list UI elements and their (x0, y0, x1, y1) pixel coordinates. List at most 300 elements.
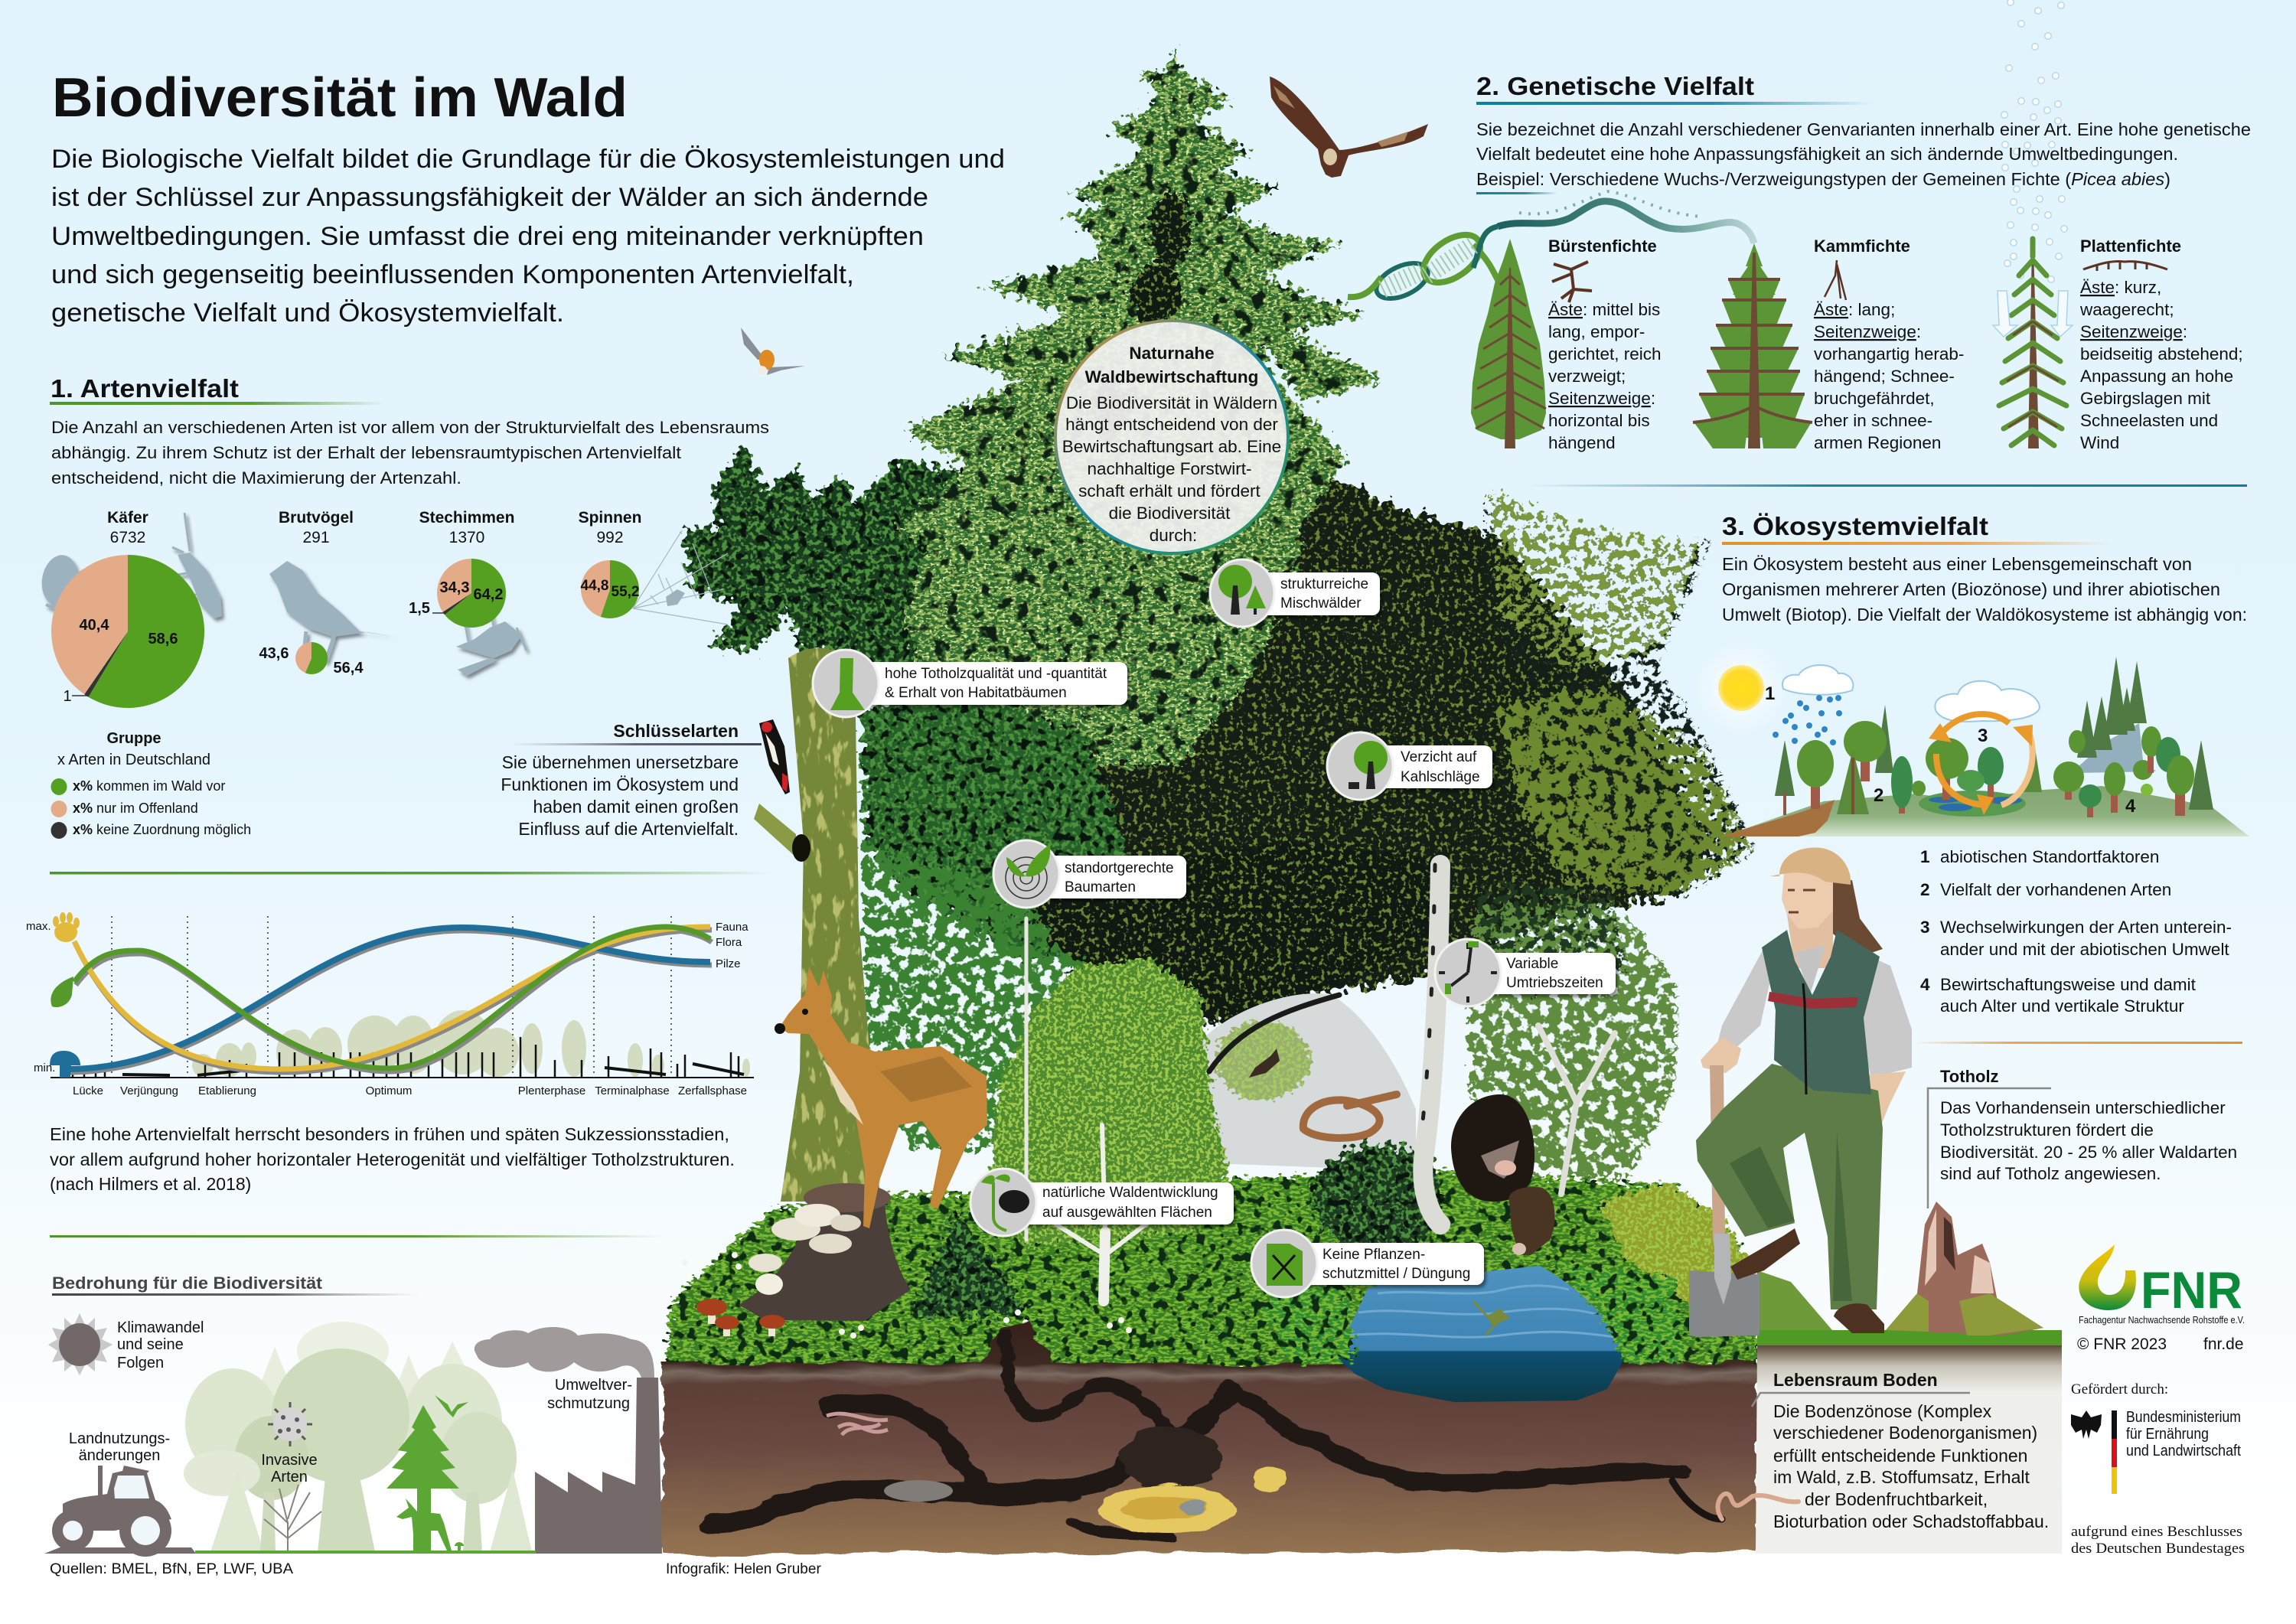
column: Plattenfichte: waagerecht; (2079, 300, 2174, 319)
icon: virus (268, 1402, 312, 1446)
leader (1928, 1088, 2051, 1208)
text: invasive (261, 1452, 318, 1485)
pie: Käfer (51, 509, 204, 708)
eye and lip (1788, 890, 1815, 912)
ecosystem trees centre group (1912, 738, 2042, 803)
text: climate: Folgen (117, 1355, 164, 1371)
sun (1694, 641, 1789, 735)
zip (1803, 983, 1806, 1094)
green spruce (386, 1405, 459, 1551)
section text: abhängig. Zu ihrem Schutz ist der Erhalt der lebensraumtypischen Artenvielfalt (51, 443, 682, 462)
FNR logo: FNR (2141, 1261, 2242, 1319)
succession chart (26, 912, 754, 1097)
central bubble: Waldbewirtschaftung (1085, 367, 1258, 386)
text: Organismen mehrerer Arten (Biozönose) und ihrer abiotischen (1722, 579, 2220, 599)
brown slope (1722, 800, 1835, 836)
moss on boulder (1215, 1020, 1310, 1100)
rule (509, 743, 762, 745)
dark broadleaf canopy, left lobes (682, 445, 995, 704)
pie: Käfer: Käfer (107, 509, 148, 527)
ecosystem scene (1694, 641, 2249, 836)
intro text: Die Biologische Vielfalt bildet die Grundlage für die Ökosystemleistungen und (51, 145, 1005, 174)
axis labels: Optimum (366, 1084, 412, 1097)
title: Biodiversität im Wald (52, 67, 628, 129)
divider green (50, 872, 773, 874)
section 2: Genetische Vielfalt (1476, 72, 2251, 194)
spade blade (1689, 1270, 1760, 1337)
pie: Brutvögel: 291 (302, 529, 330, 546)
dark twigs in birch canopy (1477, 880, 1630, 995)
heading: Lebensraum Boden (1773, 1370, 1938, 1390)
scene numbers: 1 (1765, 683, 1775, 704)
heading: 3. Ökosystemvielfalt (1722, 512, 1988, 540)
numbered list: auch Alter und vertikale Struktur (1940, 996, 2184, 1016)
pale forest backdrop (184, 1322, 532, 1552)
branch icon (1825, 260, 1846, 300)
tractor (52, 1466, 171, 1557)
raised boot (1730, 1228, 1800, 1280)
ministry name (2126, 1409, 2241, 1459)
scene numbers: 4 (2125, 796, 2136, 817)
spruce with drooping tiers (892, 46, 1383, 765)
callout: Umtriebszeiten (1435, 939, 1616, 1006)
copyright: © FNR 2023 (2077, 1335, 2167, 1353)
text: invasive: Invasive (261, 1452, 318, 1469)
curve: Fauna (74, 927, 710, 1069)
text: climate: und seine (117, 1336, 184, 1353)
column: Kammfichte: hängend; Schnee- (1814, 367, 1955, 386)
curve: Pilze (67, 928, 710, 1069)
central bubble: Die Biodiversität in Wäldern (1066, 393, 1277, 413)
callout: Mischwälder (1210, 559, 1380, 627)
sources: Quellen: BMEL, BfN, EP, LWF, UBA (50, 1561, 293, 1577)
grey shirt (1795, 945, 1825, 995)
dead stump (1886, 1202, 2043, 1335)
succession text: (nach Hilmers et al. 2018) (50, 1174, 251, 1194)
grass strip (1757, 1330, 2062, 1345)
woodpecker hole (792, 834, 810, 862)
column: Kammfichte: bruchgefährdet, (1814, 389, 1935, 408)
green leaves with sky gaps (865, 842, 1102, 1148)
text: land use (69, 1430, 170, 1464)
deer (775, 967, 987, 1228)
right sleeve (1860, 955, 1912, 1078)
branch icon (1552, 262, 1592, 302)
pie charts by group (38, 509, 728, 708)
numbered list: abiotischen Standortfaktoren (1940, 847, 2159, 866)
section 1: Artenvielfalt (50, 374, 769, 488)
heading: Bedrohung für die Biodiversität (52, 1273, 323, 1293)
central bubble (1055, 321, 1288, 553)
young green trees (987, 957, 1228, 1247)
callout: Waldentwicklung: auf ausgewählten Flächen (1042, 1205, 1212, 1221)
pie: Käfer: 1 (63, 688, 72, 705)
scene numbers: 3 (1978, 726, 1988, 746)
phase dividers (112, 916, 671, 1078)
threats section (44, 1273, 662, 1557)
text: pollution: schmutzung (547, 1395, 630, 1412)
spade handle (1710, 1065, 1725, 1270)
ecosystem right group (2053, 657, 2213, 817)
axis labels: Flora (716, 936, 742, 949)
pie: Käfer: 40,4 (80, 617, 109, 634)
cap (1769, 847, 1851, 885)
trunks and dead wood (73, 1037, 744, 1078)
text: land use: änderungen (79, 1447, 160, 1464)
column: Bürstenfichte: hängend (1548, 433, 1616, 452)
rain cloud (1773, 665, 1853, 745)
earthworm (1672, 1481, 1722, 1519)
text: Beispiel: Verschiedene Wuchs-/Verzweigungstypen der Gemeinen Fichte ( Picea abies) (1476, 169, 2170, 189)
pie: Stechimmen: 1370 (449, 529, 484, 546)
tree stump with fungi (739, 1183, 911, 1321)
pie: Brutvögel: 43,6 (259, 645, 289, 662)
face (1782, 865, 1833, 929)
woodpecker (759, 719, 790, 794)
text (1722, 554, 2247, 624)
callout: Mischwälder: strukturreiche (1280, 576, 1368, 592)
pie: Brutvögel (259, 509, 364, 677)
website: fnr.de (2203, 1335, 2244, 1353)
column: Plattenfichte: Gebirgslagen mit (2080, 389, 2211, 408)
callout: Kahlschläge (1327, 732, 1492, 800)
text: invasive: Arten (271, 1469, 308, 1485)
snowfall above Plattenfichte (2004, 2, 2064, 279)
silhouette: wasp (456, 608, 527, 676)
callout: Totholz: & Erhalt von Habitatbäumen (885, 685, 1067, 701)
column: Plattenfichte: beidseitig abstehend; (2080, 344, 2243, 364)
text: haben damit einen großen (533, 797, 739, 817)
ground (44, 1547, 536, 1554)
stag beetle (1249, 1048, 1280, 1078)
snake (1303, 1094, 1397, 1138)
robin (741, 328, 805, 375)
key species text block (501, 721, 762, 839)
ground vegetation (666, 1171, 1757, 1370)
numbered list: Bewirtschaftungsweise und damit (1940, 975, 2197, 994)
green deer (396, 1498, 452, 1551)
column: Plattenfichte: Wind (2080, 433, 2119, 452)
pie legend: x Arten in Deutschland (57, 752, 210, 768)
habitat tree trunk (781, 648, 880, 1202)
legend: forest: x% kommen im Wald vor (73, 778, 225, 794)
ministry name: Bundesministerium (2126, 1409, 2241, 1426)
white flowers (682, 1252, 1132, 1339)
neck (1787, 911, 1833, 968)
soil info box (1752, 1345, 2062, 1554)
icon: climate sun (48, 1313, 113, 1375)
pond (1336, 1266, 1623, 1402)
text (1476, 119, 2251, 189)
pie: Spinnen: 44,8 (581, 578, 608, 594)
BMEL logo (2071, 1409, 2241, 1494)
credit: Infografik: Helen Gruber (666, 1561, 821, 1577)
ribbon (1498, 201, 1754, 243)
pie: Brutvögel: 56,4 (334, 660, 364, 677)
branch icon (2083, 261, 2167, 271)
divider green lower (50, 1235, 662, 1238)
silhouette: bird (269, 561, 400, 662)
numbered list: Wechselwirkungen der Arten unterein- (1940, 918, 2232, 937)
text: Das Vorhandensein unterschiedlicher (1940, 1098, 2226, 1117)
pie: Brutvögel: Brutvögel (279, 509, 354, 527)
axis labels: Terminalphase (595, 1084, 670, 1097)
central bubble: hängt entscheidend von der (1065, 415, 1278, 434)
broken side branch (754, 804, 796, 857)
pie legend (51, 730, 251, 839)
curve: Flora (74, 927, 710, 1068)
callout: Pflanzenschutz (1251, 1230, 1484, 1297)
text: Funktionen im Ökosystem und (501, 774, 739, 794)
numbered list: 4 (1920, 975, 1930, 994)
column: Plattenfichte (2079, 236, 2243, 452)
text: climate (117, 1319, 204, 1371)
ministry name: für Ernährung (2126, 1426, 2209, 1443)
pie: Spinnen: 992 (596, 529, 624, 546)
silhouette: longhorn beetle (172, 513, 222, 618)
intro text: und sich gegenseitig beeinflussenden Komponenten Artenvielfalt, (51, 260, 854, 289)
sparse olive leaves upper right (1492, 490, 1703, 673)
trousers (1696, 1064, 1883, 1309)
text: verschiedener Bodenorganismen) (1773, 1423, 2037, 1443)
text: sind auf Totholz angewiesen. (1940, 1164, 2161, 1183)
dark bush (1313, 1144, 1443, 1251)
heading rule (50, 402, 384, 405)
leader (1752, 1393, 1970, 1407)
axis labels: Fauna (716, 921, 748, 934)
callout: Kahlschläge: Verzicht auf (1401, 749, 1477, 765)
column: Bürstenfichte (1548, 236, 1662, 452)
numbered list: 2 (1920, 880, 1930, 899)
numbered list: ander und mit der abiotischen Umwelt (1940, 940, 2229, 959)
text: Biodiversität. 20 - 25 % aller Waldarten (1940, 1143, 2237, 1162)
heading and intro (51, 67, 1005, 328)
axis labels: Pilze (716, 957, 741, 970)
silhouette: beetle round (38, 553, 84, 608)
pie legend: Gruppe (106, 730, 161, 747)
forearm and hand (1701, 1037, 1741, 1073)
icon: leaf (51, 977, 73, 1007)
axis labels: Lücke (73, 1084, 103, 1097)
standing boot (1834, 1303, 1884, 1333)
green owl (435, 1395, 468, 1417)
red mushrooms (696, 1299, 785, 1336)
divider teal (1526, 484, 2247, 487)
callout: Pflanzenschutz: schutzmittel / Düngung (1322, 1266, 1470, 1282)
axis labels: Plenterphase (518, 1084, 585, 1097)
dark canopy behind the spruce (1071, 467, 1714, 1010)
background trees (192, 1010, 750, 1077)
boulder (1192, 993, 1416, 1171)
ministry name: und Landwirtschaft (2126, 1443, 2241, 1459)
forester woman (1689, 847, 1912, 1337)
owl (1270, 77, 1428, 178)
central bubble: Naturnahe (1129, 344, 1215, 363)
curve shadows (68, 930, 712, 1072)
callout: Mischwälder: Mischwälder (1280, 595, 1362, 611)
callout: Kahlschläge: Kahlschläge (1401, 769, 1480, 785)
pie: Stechimmen (409, 509, 514, 628)
scene numbers: 2 (1874, 785, 1883, 806)
hair (1821, 880, 1883, 957)
spade tip (1714, 1234, 1731, 1305)
central chamber (1121, 1426, 1221, 1490)
column: Bürstenfichte: lang, empor- (1548, 322, 1645, 341)
dark spruce core (1091, 191, 1191, 436)
text: climate: Klimawandel (117, 1319, 204, 1336)
birch trunks (1026, 865, 1615, 1301)
text: pollution (547, 1377, 632, 1412)
small rule (1476, 192, 1557, 194)
mole (884, 1480, 953, 1502)
section text: entscheidend, nicht die Maximierung der Artenzahl. (51, 468, 461, 488)
pie: Spinnen: Spinnen (579, 509, 641, 527)
green leaves below spruce (861, 689, 1125, 964)
column: Plattenfichte: Äste: kurz, (2080, 278, 2161, 297)
succession text: Eine hohe Artenvielfalt herrscht besonders in frühen und späten Sukzessionsstadien, (50, 1124, 729, 1144)
frog (1473, 1301, 1508, 1335)
text: Sie übernehmen unersetzbare (502, 752, 739, 772)
text (1773, 1401, 2049, 1531)
pie: Spinnen: 55,2 (612, 584, 639, 600)
wild boars (1451, 1094, 1555, 1255)
heading: 1. Artenvielfalt (51, 374, 239, 403)
rule (52, 1293, 419, 1296)
axis labels: Verjüngung (120, 1084, 178, 1097)
axis labels: max. (26, 920, 51, 933)
flag bar (2112, 1410, 2117, 1494)
callout: Umtriebszeiten: Variable (1506, 956, 1558, 972)
column: Kammfichte: eher in schnee- (1814, 411, 1932, 430)
icon: mushroom (50, 1051, 80, 1078)
shoreline reeds (1263, 1263, 1684, 1362)
pie: Spinnen (579, 509, 641, 618)
axis labels (26, 920, 748, 1097)
trouser shading (1730, 1133, 1852, 1301)
column: Plattenfichte: Seitenzweige: (2080, 322, 2187, 341)
intro text: genetische Vielfalt und Ökosystemvielfalt. (51, 298, 564, 328)
Plattenfichte tree (1993, 239, 2073, 448)
intro text: ist der Schlüssel zur Anpassungsfähigkeit der Wälder an sich ändernde (51, 183, 928, 212)
intro text (51, 145, 1005, 328)
callout: Waldentwicklung: natürliche Waldentwicklung (1042, 1185, 1218, 1201)
pie: Stechimmen: 34,3 (440, 579, 469, 596)
central bubble: durch: (1150, 526, 1197, 545)
shrub (264, 1485, 321, 1551)
hand in pocket (1864, 1071, 1906, 1140)
icon: paw (53, 912, 80, 942)
section text: Die Anzahl an verschiedenen Arten ist vor allem von der Strukturvielfalt des Lebensraums (51, 418, 769, 437)
text: pollution: Umweltver- (555, 1377, 632, 1394)
column: Kammfichte: Äste: lang; (1814, 300, 1895, 319)
callout: Pflanzenschutz: Keine Pflanzen- (1322, 1247, 1425, 1263)
pie: Stechimmen: 1,5 (409, 600, 430, 617)
vest (1762, 930, 1880, 1094)
axis (51, 1077, 754, 1078)
numbered list: 1 (1920, 847, 1930, 866)
Totholz block (1928, 1067, 2237, 1208)
intro text: Umweltbedingungen. Sie umfasst die drei eng miteinander verknüpften (51, 222, 924, 251)
Totholz block: Totholz (1940, 1067, 1999, 1086)
eagle (2071, 1410, 2102, 1439)
callout: Baumarten: Baumarten (1065, 879, 1136, 895)
Bundestag note: des Deutschen Bundestages (2071, 1541, 2245, 1557)
callout: Totholz: hohe Totholzqualität und -quantität (885, 666, 1107, 682)
column: Bürstenfichte: Seitenzweige: (1548, 389, 1655, 408)
central bubble: Bewirtschaftungsart ab. Eine (1062, 437, 1281, 456)
grass slope (1757, 1270, 2062, 1345)
text (1940, 1098, 2237, 1183)
underground tunnels (709, 1335, 1684, 1538)
spider web (633, 530, 728, 624)
section text (51, 418, 769, 488)
callout: Waldentwicklung (970, 1169, 1234, 1236)
section 3: Ökosystemvielfalt (1722, 512, 2247, 624)
vest stripes (1768, 992, 1858, 1009)
mushrooms small (455, 1542, 464, 1551)
text: Einfluss auf die Artenvielfalt. (518, 819, 739, 839)
factory with chimney (535, 1378, 662, 1554)
column: Bürstenfichte: verzweigt; (1548, 367, 1626, 386)
text (501, 752, 739, 839)
axis labels: min. (34, 1061, 55, 1075)
Bürstenfichte tree (1471, 239, 1546, 448)
text: Vielfalt bedeutet eine hohe Anpassungsfähigkeit an sich ändernde Umweltbedingungen. (1476, 144, 2178, 164)
earthworm body (1718, 1494, 1799, 1519)
Bundestag note: aufgrund eines Beschlusses (2071, 1524, 2242, 1540)
shaded understorey (1018, 842, 1454, 1026)
column: Kammfichte: Kammfichte (1814, 236, 1910, 256)
Kammfichte tree (1693, 243, 1812, 448)
column: Bürstenfichte: horizontal bis (1548, 411, 1650, 430)
text: im Wald, z.B. Stoffumsatz, Erhalt (1773, 1467, 2030, 1487)
heading: 2. Genetische Vielfalt (1476, 72, 1754, 100)
spruce sapling (911, 1209, 1029, 1316)
text: Ein Ökosystem besteht aus einer Lebensgemeinschaft von (1722, 554, 2192, 574)
worms (827, 1414, 888, 1435)
soil layers (662, 1324, 1757, 1554)
column: Kammfichte: Seitenzweige: (1814, 322, 1921, 341)
callout: Baumarten (993, 840, 1186, 908)
pie: Käfer: 6732 (110, 529, 145, 546)
axis labels: Zerfallsphase (678, 1084, 747, 1097)
heading: Schlüsselarten (613, 721, 739, 741)
water ripples (1347, 1286, 1615, 1337)
callout: Totholz (813, 650, 1127, 717)
cloud above cycle (1935, 681, 2040, 722)
scene numbers (1765, 683, 2136, 817)
column: Kammfichte: armen Regionen (1814, 433, 1941, 452)
cycle arrows (1929, 714, 2033, 815)
Bundestag note (2071, 1524, 2245, 1557)
ecosystem trees left group (1775, 705, 1913, 815)
olive leaves lower right (1500, 689, 1753, 895)
central bubble: nachhaltige Forstwirt- (1087, 459, 1252, 478)
nest (1098, 1466, 1287, 1534)
FNR logo: Fachagentur Nachwachsende Rohstoffe e.V. (2079, 1315, 2245, 1326)
pie: Käfer: 58,6 (148, 631, 178, 647)
sparse dark branches upper right (1485, 497, 1757, 895)
FNR logo (2079, 1244, 2245, 1326)
column: Plattenfichte: Schneelasten und (2080, 411, 2218, 430)
column: Bürstenfichte: Bürstenfichte (1548, 236, 1657, 256)
text: Totholzstrukturen fördert die (1940, 1120, 2154, 1140)
column: Kammfichte (1814, 236, 1964, 452)
legend: no assignment: x% keine Zuordnung möglich (73, 822, 251, 837)
numbered list (1920, 847, 2232, 1016)
central bubble: die Biodiversität (1109, 504, 1231, 523)
numbered list: 3 (1920, 918, 1930, 937)
